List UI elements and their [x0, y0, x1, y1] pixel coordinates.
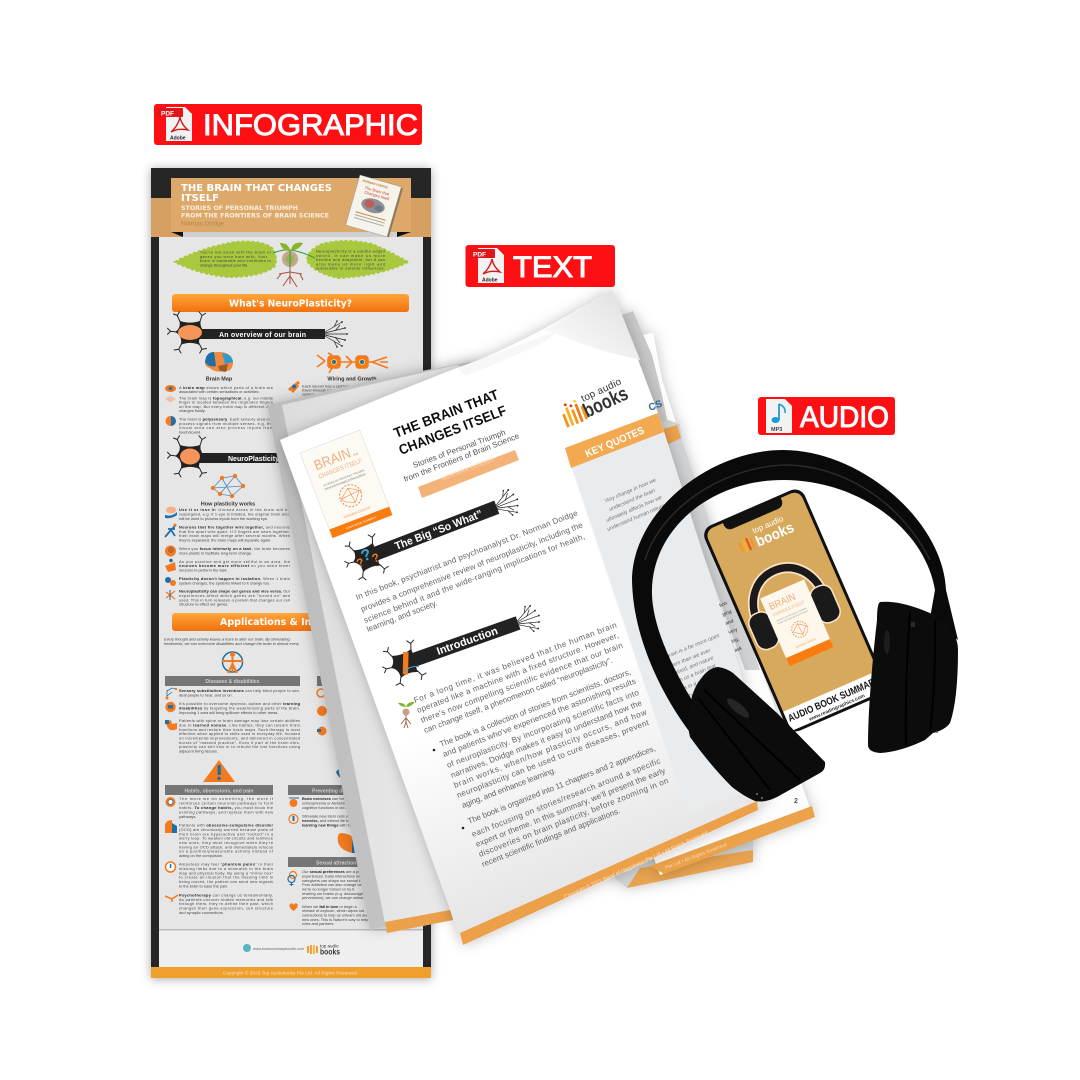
- logo: top audio books: [734, 512, 797, 557]
- page two edge text: ing,: [731, 636, 740, 645]
- text: bullet one: and patients who've experienced the astonishing results: [441, 677, 637, 759]
- section: sexual attraction: rewiring our brains (e.g. discouraging: [302, 891, 366, 896]
- text: brain overview: process signals from multiple senses, e.g. the: [179, 421, 273, 426]
- right ear cup: [868, 602, 958, 753]
- section: habits, obsessions, and pain: map and physical body. By using a "mirror box": [179, 870, 274, 875]
- banner: the big so what: ?: [359, 546, 374, 565]
- sidebar: key quotes: imagined, and nature: [666, 655, 715, 680]
- logo: top audio books: books: [580, 383, 632, 423]
- book cover: that: [353, 451, 359, 457]
- section: diseases and disabilities: effective when applied to skills used in everyday life, focused: [179, 731, 300, 736]
- text: brain overview: A brain map shows which parts of a brain are: [179, 385, 273, 390]
- section: sexual attraction: perversions), we can change unlearned.: [302, 895, 371, 900]
- author bar: NORMAN DOIDGE: [440, 456, 497, 483]
- sidebar: key quotes: system than we ever: [664, 648, 712, 672]
- icon: sprouting plant with roots: [273, 243, 315, 287]
- book cover on screen: NORMAN DOIDGE: [795, 638, 817, 649]
- book cover: STORIES OF PERSONAL TRIUMPH: [323, 468, 365, 488]
- book cover: [300, 430, 392, 538]
- banner: the big so what: ?: [370, 550, 382, 566]
- text: bullet two: discoveries on brain plasticity, before zooming in on: [477, 776, 670, 859]
- heading: how plasticity works: How plasticity works: [201, 502, 255, 508]
- back sheet: lower right: [520, 420, 753, 888]
- sidebar: key quotes: understand the brain: [608, 488, 656, 513]
- section: sexual attraction: Sexual attraction: [316, 860, 356, 866]
- sidebar: key quotes: The brain is a far more open: [656, 633, 721, 664]
- icon: pdf document: [158, 107, 192, 142]
- text: how plasticity works: neurons to perform the task.: [179, 568, 228, 572]
- icon: blue brain fragment: [336, 767, 347, 779]
- text: so what paragraph: learning, and society.: [365, 599, 439, 634]
- poster title: [181, 183, 332, 228]
- icon: pdf document: [470, 248, 504, 284]
- section: sexual attraction: caregivers can shape our sexual tastes.: [302, 878, 371, 883]
- poster title: ITSELF: [181, 193, 219, 204]
- left ear cup: [688, 667, 825, 802]
- leaf callout: right: also make us more rigid and: [316, 261, 385, 266]
- section: sexual attraction: roles and partners.: [302, 921, 334, 926]
- text: introduction paragraph: can change itself, a phenomenon called “neuroplasticity”.: [423, 656, 614, 735]
- icon: network of nodes: [211, 474, 245, 498]
- section: sexual attraction: we're no longer turned on by it.: [302, 886, 355, 891]
- text: bullet two: expert or theme. In this summary, we'll present the early: [474, 766, 667, 849]
- section: habits, obsessions, and pain: new ones, they must recognize when they're: [179, 840, 273, 845]
- page two edge text: and: [725, 618, 735, 627]
- button heading: applications and impact: [172, 613, 409, 631]
- book cover on screen: STORIES OF PERSONAL TRIUMPH: [776, 607, 808, 623]
- label: text: TEXT: [513, 251, 592, 284]
- icon: person in wheel: [222, 652, 243, 673]
- text: brain overview: associated with certain sensations or activities.: [179, 389, 260, 394]
- icon: warning triangle: [203, 760, 235, 782]
- leaf callout: right: flexible and adaptable, but it can: [316, 257, 385, 262]
- text: how plasticity works: their brain maps will merge after several months. When: [179, 533, 290, 538]
- section: sexual attraction: new ones. This is Nature's way to help: [302, 917, 368, 922]
- text: brain overview: [179, 384, 374, 434]
- text: applications intro: Every thought and activity leaves a trace to alter our brain. By stimulating: [164, 636, 290, 642]
- text: bullet one: brain works, when/how plasticity occurs, and how: [452, 708, 648, 790]
- text: bullet one: neuroplasticity can be used to cure diseases, prevent: [455, 718, 651, 800]
- text: how plasticity works: Plasticity doesn't happen in isolation. When 1 brain: [179, 576, 290, 581]
- back sheet: right page two: Pte Ltd • All Rights Reserved: [665, 842, 727, 870]
- label: audio: [758, 397, 895, 435]
- section: diseases and disabilities: Patients with spine or brain damage may lose certain abilities: [179, 718, 300, 723]
- text: so what paragraph: science behind it and the wide-ranging implications for health,: [362, 532, 586, 625]
- section: diseases and disabilities: [165, 676, 301, 754]
- button heading: what's neuroplasticity: What's NeuroPlasticity?: [229, 298, 352, 310]
- section: preventing decline: cognitive functions in old age.: [302, 805, 353, 810]
- sidebar: key quotes: KEY QUOTES: [583, 425, 646, 460]
- poster bottom logos: www.booksummarybundle.com: [253, 947, 304, 951]
- icons: plasticity bullets: [165, 506, 177, 600]
- poster title: FROM THE FRONTIERS OF BRAIN SCIENCE: [181, 212, 329, 220]
- section: habits, obsessions, and pain: worry loop. To weaken old circuits and reinforce: [179, 836, 273, 840]
- section stub: second applications column: [317, 676, 427, 736]
- text: how plasticity works: When you focus intensely on a task, the brain becomes: [179, 546, 290, 551]
- text: how plasticity works: used. This in turn releases a protein that changes our cell: [179, 597, 290, 602]
- section: habits, obsessions, and pain: pathways.: [179, 814, 197, 819]
- headset: [632, 450, 958, 802]
- section: habits, obsessions, and pain: acting on the compulsion.: [179, 853, 223, 858]
- icon: headphones on screen: [733, 553, 843, 653]
- text: how plasticity works: Use it or lose it: Unused areas in the brain will be: [179, 507, 290, 512]
- sidebar: key quotes: “Any change in how we: [603, 478, 657, 505]
- text: how plasticity works: reassigned, e.g. if 1 eye is blinded, the original brain area: [179, 512, 291, 516]
- icon: pdf document: PDF: [161, 110, 174, 118]
- icon: pdf document: Adobe: [482, 278, 498, 284]
- poster bottom logos: [243, 944, 340, 956]
- text: brain overview: The brain map is topographical, e.g. our middle: [179, 396, 273, 400]
- text: bullet one: [433, 667, 651, 810]
- text: bullet one: The book is a collection of stories from scientists, doctors,: [438, 667, 632, 749]
- section: preventing decline: Brain exercises can help people with: [302, 796, 367, 801]
- title: THE BRAIN THAT: [391, 386, 501, 441]
- sidebar: key quotes: ...given us a brain that: [666, 663, 717, 689]
- icon: pdf document: PDF: [473, 252, 486, 258]
- page two edge text: ging: [722, 609, 733, 618]
- footer band with copyright: Copyright © 2021 Band of Happiness Pte Ltd • All Rights Reserved: [563, 830, 709, 901]
- text: how plasticity works: that fire apart wire apart. If 2 fingers are sewn together,: [179, 529, 290, 534]
- text: bullet one: of neuroplasticity. By incorporating scientific facts into: [445, 688, 641, 770]
- text: how plasticity works: will be used to process inputs from the working eye.: [179, 516, 268, 521]
- text: how plasticity works: structure to affect our genes.: [179, 602, 228, 606]
- section: habits, obsessions, and pain: to the brain to ease the pain.: [179, 883, 228, 888]
- title: CHANGES ITSELF: [396, 402, 509, 458]
- page two edge text: tion: [719, 600, 728, 609]
- page number: 2: [794, 798, 798, 805]
- poster footer: Copyright © 2023 Top Audiobooks Pte Ltd. All Rights Reserved.: [223, 970, 358, 976]
- icon: heart: [338, 833, 358, 853]
- headband: [632, 450, 958, 735]
- section: sexual attraction: connections to help us unlearn old and: [302, 912, 369, 917]
- leaf callout: left: [175, 242, 276, 277]
- poster bottom logos: books: [320, 948, 340, 956]
- section: habits, obsessions, and pain: existing pathways, and replace them with new: [179, 809, 273, 814]
- caption: audio book summary: [787, 675, 884, 730]
- section: sexual attraction: release of oxytocin, which wipes out: [302, 908, 365, 913]
- section: habits, obsessions, and pain: being moved, the patient can send new signals: [179, 879, 273, 884]
- book cover: FROM THE FRONTIERS OF BRAIN SCIENCE: [324, 472, 367, 491]
- sidebar: key quotes: understand human nature: [606, 503, 666, 533]
- leaf callout: left: genes you were born with. Your: [200, 254, 268, 259]
- banner: the big so what: ?: [354, 555, 366, 571]
- section: sexual attraction: experiences. Early interactions with: [302, 874, 363, 878]
- text: bullet one: aging, and enhance learning.: [460, 766, 557, 810]
- book cover: BRAIN: [312, 445, 353, 473]
- text: brain overview: The brain is polysensory. Each sensory area can: [179, 416, 273, 422]
- text: brain overview: touch/sound.: [179, 429, 201, 434]
- sidebar: key quotes: survives in a changing: [668, 672, 719, 698]
- text: bullet one: narratives, Doidge makes it easy to understand how the: [449, 698, 644, 780]
- section: habits, obsessions, and pain: [165, 785, 274, 915]
- back sheet: left grey: [267, 362, 600, 930]
- text: applications intro: treatments, we can overcome disabilities and change the brain in almost every: [164, 641, 300, 646]
- section: habits, obsessions, and pain: habits. To change habits, you must block the: [179, 805, 273, 810]
- book cover: NORMAN DOIDGE: [343, 505, 372, 519]
- section: diseases and disabilities: It's possible to overcome dyslexia, autism and other learning: [179, 701, 301, 706]
- text: how plasticity works: they're separated, the brain maps will separate again.: [179, 538, 271, 542]
- section: diseases and disabilities: deaf people to hear, and so on.: [179, 692, 233, 698]
- text: brain overview: on the map. But every brain map is different and: [179, 404, 273, 409]
- section: preventing decline: schizophrenia or Alzheimer's recover: [302, 800, 366, 806]
- section: habits, obsessions, and pain: reinforces certain neuronal pathways to form: [179, 800, 273, 806]
- footer band with copyright: [460, 801, 758, 945]
- text: how plasticity works: more plastic to facilitate long-term change.: [179, 550, 252, 556]
- front page: [280, 290, 770, 945]
- poster header band: [151, 175, 431, 237]
- text: brain overview: synapses: [302, 392, 318, 396]
- text: how plasticity works: Neurons that fire together wire together, and neurons: [179, 524, 290, 529]
- text: brain overview: finger is located between the ring/index fingers: [179, 400, 273, 404]
- book cover on screen: [760, 579, 834, 666]
- heading: brain map: Brain Map: [206, 376, 233, 382]
- leaf callout: left: brain is malleable and continues to: [200, 258, 271, 263]
- book cover: Changes Itself: [364, 189, 391, 202]
- section: habits, obsessions, and pain: missing limbs due to a mismatch in the brain: [179, 866, 273, 871]
- banner: the big so what: [339, 480, 526, 585]
- section: diseases and disabilities: plasticity can still kick in to rebuild the lost functions using: [179, 744, 300, 749]
- section: diseases and disabilities: adjacent living tissues.: [179, 748, 218, 754]
- poster title: Norman Doidge: [181, 220, 224, 228]
- section: diseases and disabilities: on incremental improvements, and delivered in concentrated: [179, 735, 300, 740]
- section: diseases and disabilities: Improving 1 area will bring spillover effects to other areas.: [179, 710, 278, 715]
- section: habits, obsessions, and pain: and synaptic connections.: [179, 910, 224, 915]
- section: habits, obsessions, and pain: to create an illusion that the missing limb is: [179, 874, 273, 880]
- book cover on screen: CHANGES ITSELF: [772, 599, 805, 618]
- sidebar: key quotes: world by changing itself: [675, 678, 729, 705]
- page two edge text: ask: [734, 645, 743, 654]
- icon: mp3 document: MP3: [771, 427, 782, 433]
- text: how plasticity works: [179, 507, 291, 606]
- book cover: CHANGES ITSELF: [318, 458, 363, 481]
- book cover: AUDIO BOOK SUMMARY: [345, 515, 377, 530]
- label: infographic: [154, 104, 422, 145]
- book cover: [346, 175, 403, 237]
- book cover: NORMAN DOIDGE: [362, 179, 388, 190]
- section: sexual attraction: When we fall in love or begin a: [302, 904, 358, 909]
- poster title: THE BRAIN THAT CHANGES: [181, 183, 332, 194]
- section: preventing decline: [288, 785, 423, 828]
- banner: an overview of our brain: [168, 312, 348, 353]
- banner: neuroplasticity: [168, 436, 340, 477]
- leaf callout: right: vulnerable to outside influences.: [316, 266, 385, 271]
- text: how plasticity works: Neuroplasticity can shape our genes and vice versa. Our: [179, 588, 291, 594]
- text: introduction paragraph: operated like a machine with a fixed structure. However,: [416, 631, 620, 715]
- text: introduction paragraph: For a long time, it was believed that the human brain: [413, 620, 618, 705]
- section: habits, obsessions, and pain: Psychotherapy can change us fundamentally.: [179, 892, 273, 898]
- section: habits, obsessions, and pain: having an OCD attack, and immediately refocus: [179, 844, 273, 849]
- caption: audio book summary: www.readingraphics.com: [807, 693, 867, 723]
- text: brain overview: travel through synapses to other: [302, 388, 358, 392]
- book cover: The Brain that: [364, 185, 390, 197]
- text: introduction paragraph: there's now compelling scientific evidence that our brain: [420, 641, 624, 725]
- sidebar: key quotes: ultimately affects how we: [605, 495, 663, 524]
- icon: small plant: [398, 702, 415, 728]
- section: sexual attraction: Our sexual preferences are a product of our: [302, 869, 381, 874]
- banner: the big so what: The Big “So What”: [393, 508, 484, 553]
- poster title: STORIES OF PERSONAL TRIUMPH: [181, 205, 298, 212]
- label: audio: AUDIO: [800, 401, 889, 434]
- text: bullet two: each focusing on stories/research around a specific: [470, 756, 662, 839]
- logo: top audio books: top audio: [751, 514, 785, 536]
- text: how plasticity works: neurons become more efficient so you need fewer: [179, 563, 291, 568]
- text: applications intro: [164, 636, 300, 646]
- banner: introduction: Introduction: [435, 625, 500, 658]
- banner: introduction: [377, 596, 547, 690]
- button heading: applications and impact: Applications & Impact: [220, 617, 338, 628]
- subtitle: Stories of Personal Triumph: [412, 428, 507, 470]
- section: habits, obsessions, and pain: on a positive/pleasurable activity instead of: [179, 848, 274, 854]
- label: text: [466, 245, 615, 287]
- banner: neuroplasticity: NeuroPlasticity: [228, 456, 279, 463]
- section: sexual attraction: Porn addiction can also change us, but: [302, 882, 370, 887]
- back sheet: left light: [282, 365, 600, 933]
- icons: brain overview bullets: [165, 382, 299, 426]
- logo: top audio books: top audio: [580, 376, 624, 405]
- section: preventing decline: Stimulate new stem cells with: [302, 814, 353, 818]
- section: diseases and disabilities: disabilities by targeting the weak/missing parts of the brain.: [179, 705, 300, 710]
- page two edge text: [647, 398, 743, 654]
- leaf callout: left: You're not stuck with the brain or: [200, 250, 272, 254]
- back sheet: right page two: [560, 311, 815, 875]
- section: habits, obsessions, and pain: their brain are hyperactive and "locked" in a: [179, 831, 274, 836]
- phone: [701, 486, 890, 735]
- text: bullet two: The book is organized into 11 chapters and 2 appendices,: [466, 744, 657, 826]
- label: infographic: INFOGRAPHIC: [203, 109, 418, 142]
- panel: infographic poster: [151, 168, 431, 978]
- button heading: what's neuroplasticity: [172, 294, 409, 312]
- text: bullet two: recent scientific findings and applications.: [480, 806, 621, 869]
- section: habits, obsessions, and pain: The more we do something, the more it: [179, 796, 274, 801]
- section: habits, obsessions, and pain: Patients with obsessive-compulsive disorder: [179, 822, 273, 828]
- text: how plasticity works: As you practice and get more skillful in an area, the: [179, 559, 290, 564]
- leaf callout: right: [307, 241, 408, 278]
- section: diseases and disabilities: functions and restore their brain maps. Such therapy is most: [179, 727, 301, 732]
- section: diseases and disabilities: due to learned nonuse. Like babies, they can relearn brain: [179, 722, 300, 727]
- text: how plasticity works: experiences affect which genes are "turned on" and: [179, 593, 290, 598]
- poster bottom logos: top audio: [320, 944, 339, 948]
- section: habits, obsessions, and pain: changes their gene expression, cell structure: [179, 906, 273, 910]
- section: habits, obsessions, and pain: through them, they re-define their past, which: [179, 901, 273, 906]
- page two edge text: very: [728, 627, 739, 636]
- icon: neurons wiring: [317, 353, 388, 373]
- text: how plasticity works: system changes, the systems linked to it change too.: [179, 580, 270, 585]
- section: habits, obsessions, and pain: (OCD) are chronically worried because parts of: [179, 827, 274, 832]
- text: brain overview: changes fluidly.: [179, 408, 206, 413]
- author bar: [418, 450, 519, 498]
- leaf callout: right: sword. It can make us more: [316, 253, 385, 258]
- logo: top audio books: books: [753, 519, 797, 551]
- poster footer: [151, 967, 431, 978]
- book cover on screen: FROM THE FRONTIERS OF SCIENCE: [778, 610, 809, 625]
- section: sexual attraction: [288, 857, 423, 926]
- sidebar: key quotes: [565, 413, 768, 814]
- text: so what paragraph: In this book, psychiatrist and psychoanalyst Dr. Norman Doidge: [354, 508, 579, 602]
- section: preventing decline: Preventing decline: [312, 788, 357, 794]
- section: diseases and disabilities: bursts of "massed practice". Even if part of the brain dies,: [179, 740, 300, 745]
- banner: an overview of our brain: An overview of our brain: [219, 332, 306, 339]
- text: so what paragraph: provides a comprehensive review of neuroplasticity, including the: [359, 520, 584, 614]
- section: diseases and disabilities: Sensory substitution inventions can help blind people to see,: [179, 688, 300, 693]
- icon: brain map: [205, 352, 233, 372]
- text: brain overview: visual area can also process inputs from: [179, 425, 273, 430]
- page two edge text: CS: [647, 398, 664, 414]
- section: preventing decline: learning new things with focus.: [302, 822, 358, 828]
- caption: audio book summary: AUDIO BOOK SUMMARY: [787, 675, 882, 725]
- section: habits, obsessions, and pain: Amputees may feel "phantom pains" in their: [179, 862, 274, 866]
- logo: top audio books: [559, 376, 632, 428]
- text: bullet two: [462, 744, 670, 869]
- section: preventing decline: exercise, and extend life by: [302, 818, 350, 823]
- heading: wiring and growth: Wiring and Growth: [327, 376, 377, 382]
- section: habits, obsessions, and pain: As patients uncover hidden memories and talk: [179, 897, 273, 902]
- text: brain overview: Each neuron has a cell body and an axon: [302, 384, 374, 388]
- subtitle: from the Frontiers of Brain Science: [402, 431, 521, 484]
- leaf callout: right: Neuroplasticity is a double-edged: [316, 248, 385, 254]
- section: habits, obsessions, and pain: Habits, obsessions, and pain: [185, 788, 253, 794]
- leaf callout: left: change throughout your life.: [200, 263, 248, 268]
- icon: pdf document: Adobe: [170, 136, 186, 142]
- section: diseases and disabilities: Diseases & disabilities: [206, 679, 260, 685]
- book cover on screen: BRAIN: [768, 592, 798, 613]
